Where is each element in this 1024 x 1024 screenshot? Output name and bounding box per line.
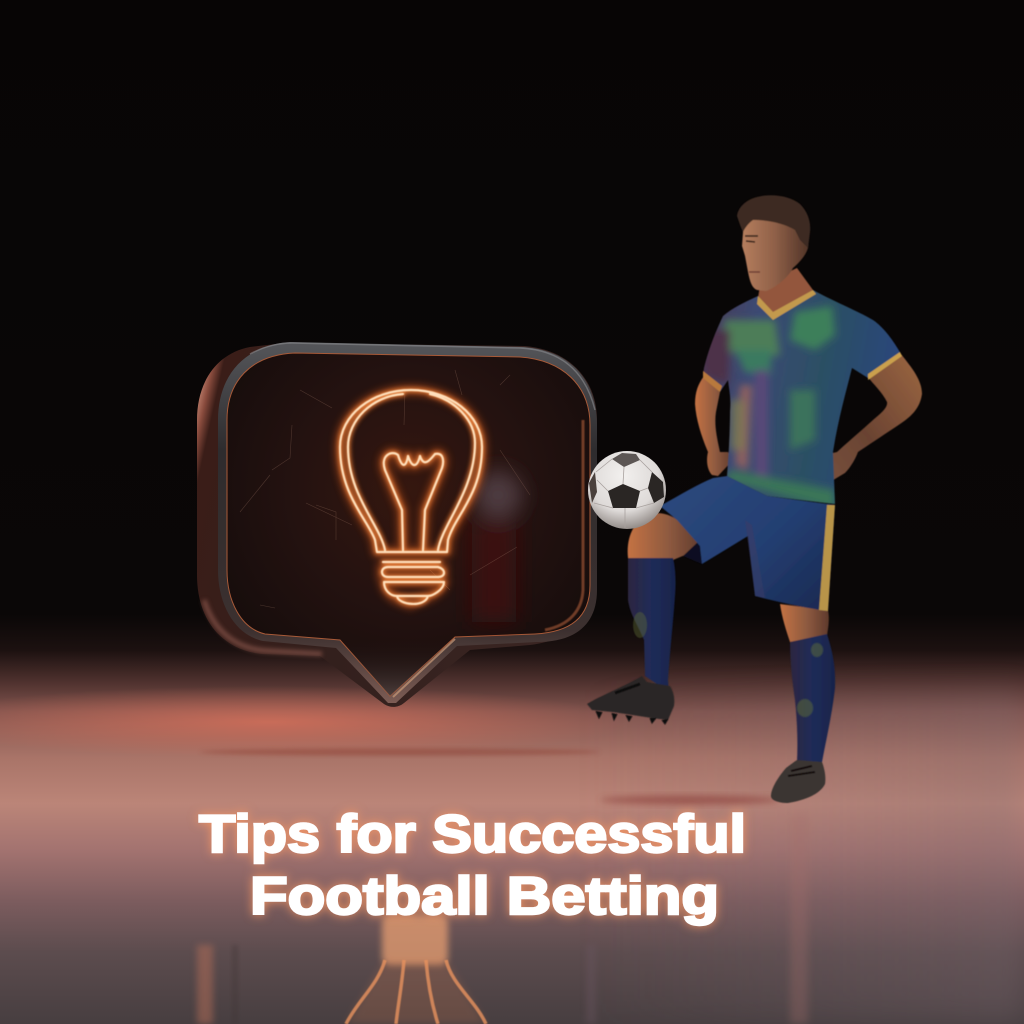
standing leg thigh [780,604,829,642]
player reflection in glass [472,471,522,622]
football player [587,195,922,803]
bulb neon lines [340,390,482,604]
ball panels [589,453,664,508]
jersey collar [757,290,816,320]
right copper inner edge [545,420,583,630]
raised leg sock [628,558,676,692]
right arm and hand [791,354,922,491]
left arm [695,376,733,476]
standing boot laces [788,766,815,776]
tail rim highlight [393,639,455,697]
bubble front rim [218,342,597,703]
standing boot [771,760,825,803]
speech bubble with lightbulb [197,342,597,707]
bubble back copper side [197,343,597,707]
hair [737,195,810,248]
mouth [749,271,760,273]
sleeve cuffs [703,371,722,392]
ball seams [594,459,654,528]
standing sock pattern [797,643,823,717]
glass scratches [240,370,530,608]
icon: glowing lightbulb [340,390,482,604]
bubble glass face [227,353,590,696]
eye and brow [745,236,758,242]
title [199,805,746,926]
rim top highlight [250,343,595,410]
tail glass highlight [340,637,455,696]
standing leg sock [790,634,835,762]
neck [758,268,813,318]
shorts [660,476,835,611]
soccer ball [588,451,666,529]
bulb wide halo [340,390,482,604]
head [737,195,810,291]
title line 1: Tips for Successful [199,805,746,864]
jersey [703,290,902,510]
bulb close halo [340,390,482,604]
raised leg skin [628,513,702,560]
bulb reflection on floor [346,915,486,1024]
title line 2: Football Betting [250,867,719,926]
raised sock pattern [633,612,647,638]
copper bottom edge highlight [204,600,322,654]
bubble reflection strips on floor [197,815,808,1024]
floor shadow under player [600,796,780,804]
raised boot [587,676,674,724]
